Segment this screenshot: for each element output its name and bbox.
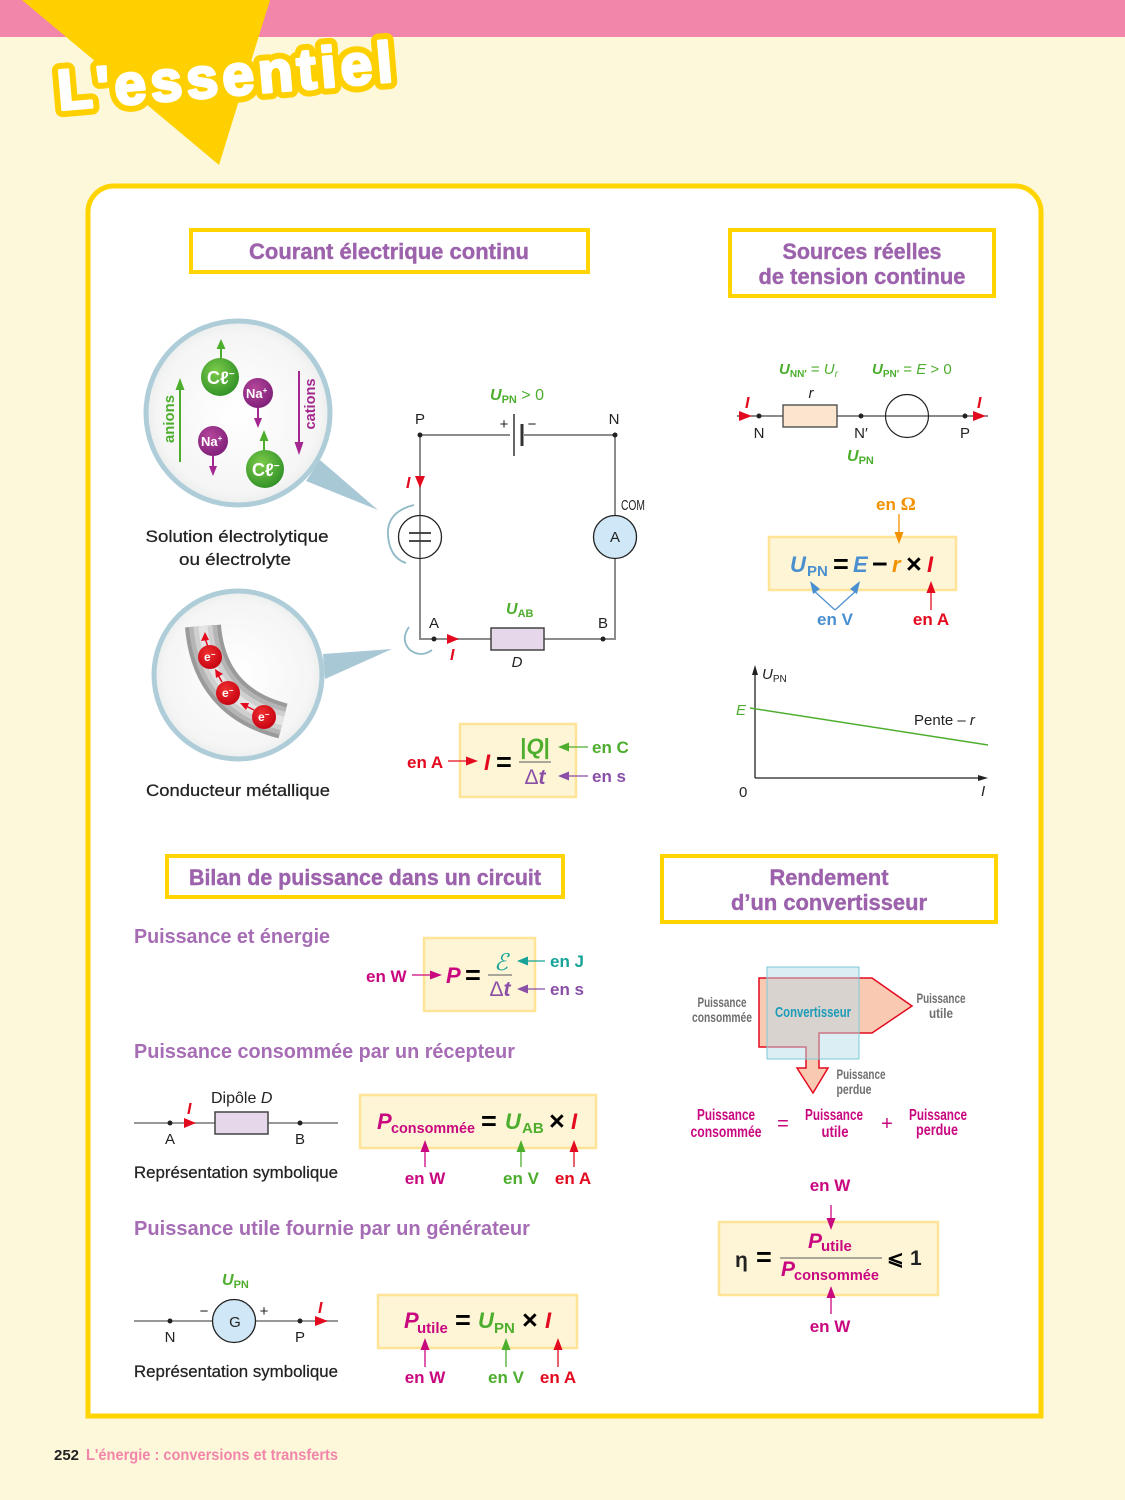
- series model of source: I: [745, 395, 750, 412]
- nodes: [418, 432, 618, 642]
- formula: UPN = E - rI: en V: [817, 610, 854, 629]
- formula: rendement: P: [781, 1258, 796, 1281]
- graph: UPN vs I: PN: [773, 674, 787, 685]
- formula: rendement: en W: [810, 1176, 851, 1195]
- circuit labels: N: [609, 411, 619, 428]
- formula: rendement: consommée: [794, 1267, 879, 1284]
- series model of source: =: [807, 361, 824, 378]
- converter diagram: perdue: [836, 1081, 872, 1097]
- series model of source: U: [872, 361, 884, 378]
- ion Cl top: −: [229, 369, 235, 380]
- ion Na right: [243, 378, 273, 428]
- zoom lens: solution électrolytique: [146, 321, 378, 510]
- formula: P = E / dt: Δt: [489, 978, 512, 1001]
- zoom lens: conducteur: [154, 591, 392, 759]
- dipole symbol: B: [295, 1131, 305, 1148]
- converter diagram: Puissance: [836, 1066, 886, 1082]
- formula: I = Q / dt: en A: [407, 753, 443, 772]
- power balance equation: perdue: [916, 1122, 958, 1139]
- circuit labels: A: [429, 615, 439, 632]
- formula: Putile: I: [545, 1308, 552, 1333]
- title: L'essentiel: [55, 30, 395, 123]
- generator symbol: PN: [234, 1279, 249, 1291]
- formula: Putile: P: [404, 1308, 419, 1333]
- ion Na right: +: [263, 386, 268, 395]
- circuit labels: D: [512, 654, 523, 671]
- footer: L'énergie : conversions et transferts: [86, 1447, 338, 1464]
- generator symbol: U: [222, 1272, 234, 1289]
- formula: rendement: ⩽: [887, 1248, 904, 1270]
- heading: rendement: Rendement: [770, 865, 889, 890]
- series model of source: =: [899, 361, 916, 378]
- graph: UPN vs I: 0: [739, 784, 747, 801]
- ion Cl top: Cℓ: [207, 368, 229, 388]
- formula: rendement: [719, 1176, 938, 1336]
- dipole symbol: Dipôle D: [211, 1090, 273, 1107]
- electrons: e: [204, 650, 211, 664]
- circuit labels: P: [415, 411, 425, 428]
- power balance equation: consommée: [690, 1124, 762, 1141]
- graph: UPN vs I: Pente – r: [914, 712, 976, 729]
- circuit labels: B: [598, 615, 608, 632]
- formula: P = E / dt: =: [465, 960, 481, 990]
- ammeter: [594, 516, 636, 558]
- formula: rendement: 1: [910, 1247, 922, 1270]
- series model of source: r: [808, 385, 814, 402]
- heading: rendement: [662, 856, 996, 922]
- caption: solution: ou électrolyte: [179, 550, 291, 569]
- anions arrow: anions: [161, 395, 178, 443]
- dipole symbol: [134, 1090, 338, 1148]
- yellow triangle: [22, 0, 270, 165]
- series model of source: N′: [854, 425, 868, 442]
- circuit labels: [415, 387, 645, 671]
- formula: UPN = E - rI: E: [853, 552, 869, 577]
- battery: +: [500, 416, 509, 433]
- formula: I = Q / dt: en C: [592, 738, 629, 757]
- formula: P = E / dt: en W: [366, 967, 408, 986]
- formula: Putile: PN: [494, 1320, 515, 1337]
- graph: UPN vs I: E: [736, 702, 747, 719]
- dipole symbol: I: [187, 1101, 192, 1118]
- generator symbol: I: [318, 1300, 323, 1317]
- series model of source: PN: [859, 455, 874, 467]
- formula: UPN = E - rI: U: [790, 552, 807, 577]
- caption: solution: [146, 527, 328, 569]
- series model of source: r: [835, 369, 839, 380]
- ion Na left: [198, 426, 228, 476]
- subheading: puissance et énergie: Puissance et énergie: [134, 926, 330, 948]
- formula: Putile: en V: [488, 1368, 525, 1387]
- ion Cl bottom: −: [274, 461, 280, 472]
- formula: UPN = E - rI: −: [872, 549, 888, 579]
- converter diagram: utile: [929, 1005, 953, 1021]
- ion Cl top: [201, 339, 239, 396]
- metal halo: [405, 627, 432, 654]
- electrons: e: [258, 710, 265, 724]
- current arrows: I: [406, 475, 411, 492]
- ion Cl bottom: [246, 430, 284, 488]
- caption: représentation 2: Représentation symbolique: [134, 1362, 338, 1381]
- formula: I = Q / dt: I: [484, 750, 491, 775]
- electrons: −: [211, 650, 216, 659]
- formula: Pconsommée: ×: [549, 1106, 565, 1136]
- formula: I = Q / dt: =: [496, 747, 512, 777]
- power balance equation: Puissance: [805, 1107, 863, 1124]
- current arrows: [406, 475, 459, 664]
- formula: Pconsommée: =: [481, 1106, 497, 1136]
- formula: UPN = E - rI: r: [892, 552, 902, 577]
- formula: I = Q / dt: Δt: [524, 766, 547, 789]
- circuit labels: U: [506, 601, 518, 618]
- formula: rendement: =: [756, 1242, 772, 1272]
- heading: sources réelles: Sources réelles: [782, 239, 942, 264]
- formula: UPN = E - rI: en Ω: [876, 494, 916, 515]
- ion Na left: Na: [201, 434, 218, 449]
- heading: rendement: d’un convertisseur: [731, 890, 927, 915]
- subheading: récepteur: Puissance consommée par un récepteur: [134, 1041, 515, 1063]
- formula: I = Q / dt: |Q|: [520, 734, 550, 759]
- formula: Putile: [378, 1295, 577, 1387]
- series model of source: P: [960, 425, 970, 442]
- caption: conducteur: Conducteur métallique: [146, 781, 330, 800]
- heading: sources réelles: [730, 230, 994, 296]
- series model of source: U: [847, 448, 859, 465]
- electrons: [198, 632, 276, 729]
- electrolyte cell: [388, 505, 442, 563]
- series model of source: [737, 361, 988, 467]
- formula: P = E / dt: [366, 938, 584, 1011]
- series model of source: U: [824, 361, 835, 378]
- formula: P = E / dt: ℰ: [494, 949, 510, 975]
- source circle: [886, 394, 928, 438]
- generator symbol: N: [165, 1329, 175, 1346]
- ammeter: A: [610, 529, 620, 546]
- formula: Pconsommée: [360, 1095, 596, 1188]
- heading: sources réelles: de tension continue: [758, 264, 966, 289]
- main panel: [88, 186, 1041, 1416]
- circuit labels: AB: [518, 608, 534, 620]
- converter diagram: Puissance: [698, 994, 747, 1010]
- anions arrow: [161, 378, 184, 462]
- formula: Pconsommée: en W: [405, 1169, 446, 1188]
- converter diagram: Puissance: [916, 990, 966, 1006]
- electrons: e: [222, 686, 229, 700]
- series model of source: NN′: [790, 369, 807, 380]
- power balance equation: +: [881, 1113, 893, 1135]
- subheading: générateur: Puissance utile fournie par un générateur: [134, 1218, 530, 1240]
- generator symbol: P: [295, 1329, 305, 1346]
- heading: bilan de puissance: [167, 856, 563, 897]
- series model of source: U: [779, 361, 791, 378]
- resistor r: [783, 405, 837, 427]
- electrons: −: [265, 710, 270, 719]
- formula: Pconsommée: I: [571, 1109, 578, 1134]
- heading: courant électrique continu: [191, 230, 588, 272]
- current arrows: I: [450, 647, 455, 664]
- formula: rendement: utile: [821, 1238, 852, 1255]
- formula: UPN = E - rI: [769, 494, 956, 629]
- metal wire: [203, 626, 283, 721]
- series model of source: N: [754, 425, 764, 442]
- formula: Pconsommée: AB: [522, 1120, 544, 1137]
- circuit diagram: [388, 387, 645, 671]
- top pink band: [0, 0, 1125, 37]
- electrons: −: [229, 686, 234, 695]
- formula: Putile: U: [478, 1308, 495, 1333]
- circuit labels: U: [490, 387, 502, 404]
- graph: UPN vs I: I: [981, 783, 985, 800]
- circuit labels: PN: [502, 394, 517, 406]
- formula: Putile: ×: [522, 1305, 538, 1335]
- formula: Putile: en A: [540, 1368, 576, 1387]
- formula: rendement: P: [808, 1230, 823, 1253]
- circuit labels: > 0: [517, 387, 544, 404]
- formula: UPN = E - rI: ×: [906, 549, 922, 579]
- formula: Pconsommée: P: [377, 1109, 392, 1134]
- generator symbol: +: [260, 1303, 269, 1320]
- series model of source: I: [977, 395, 982, 412]
- formula: UPN = E - rI: PN: [807, 563, 828, 580]
- battery: [500, 414, 537, 456]
- formula: P = E / dt: P: [446, 963, 461, 988]
- formula: P = E / dt: en J: [550, 952, 584, 971]
- graph: UPN vs I: [736, 665, 988, 801]
- heading: bilan de puissance: Bilan de puissance dans un circuit: [189, 865, 542, 890]
- ion Na left: +: [218, 434, 223, 443]
- caption: représentation 1: Représentation symbolique: [134, 1163, 338, 1182]
- formula: I = Q / dt: en s: [592, 767, 626, 786]
- cations arrow: cations: [302, 378, 319, 430]
- resistor D: [491, 628, 544, 650]
- generator symbol: G: [229, 1314, 241, 1331]
- power balance equation: Puissance: [697, 1107, 755, 1124]
- generator symbol: [134, 1272, 338, 1346]
- formula: UPN = E - rI: en A: [913, 610, 949, 629]
- ion Na right: Na: [246, 386, 263, 401]
- formula: rendement: en W: [810, 1317, 851, 1336]
- series model of source: E > 0: [916, 361, 952, 378]
- caption: solution: Solution électrolytique: [146, 527, 328, 546]
- formula: I = Q / dt: [407, 724, 629, 797]
- converter diagram: Convertisseur: [775, 1004, 851, 1021]
- formula: Putile: =: [455, 1305, 471, 1335]
- ion Cl bottom: Cℓ: [252, 460, 274, 480]
- battery: −: [528, 416, 537, 433]
- formula: P = E / dt: en s: [550, 980, 584, 999]
- formula: Pconsommée: U: [505, 1109, 522, 1134]
- converter diagram: [692, 967, 966, 1097]
- graph: UPN vs I: U: [762, 666, 773, 683]
- converter diagram: consommée: [692, 1009, 752, 1025]
- cations arrow: [294, 371, 319, 455]
- formula: Putile: en W: [405, 1368, 446, 1387]
- formula: rendement: η: [735, 1249, 748, 1272]
- power balance equation: utile: [822, 1124, 849, 1141]
- power balance equation: =: [777, 1113, 789, 1135]
- formula: Pconsommée: en V: [503, 1169, 540, 1188]
- power balance equation: Puissance: [909, 1107, 967, 1124]
- circuit labels: COM: [621, 497, 645, 514]
- title: L'essentiel: [55, 30, 395, 123]
- power balance equation: [690, 1107, 967, 1141]
- formula: Putile: utile: [417, 1320, 448, 1337]
- generator symbol: −: [200, 1303, 209, 1320]
- formula: Pconsommée: en A: [555, 1169, 591, 1188]
- heading: courant électrique continu: Courant électrique continu: [249, 239, 529, 264]
- formula: UPN = E - rI: =: [833, 549, 849, 579]
- dipole symbol: A: [165, 1131, 175, 1148]
- formula: Pconsommée: consommée: [391, 1120, 475, 1137]
- series model of source: PN′: [883, 369, 900, 380]
- footer: 252: [54, 1447, 79, 1464]
- formula: UPN = E - rI: I: [927, 552, 934, 577]
